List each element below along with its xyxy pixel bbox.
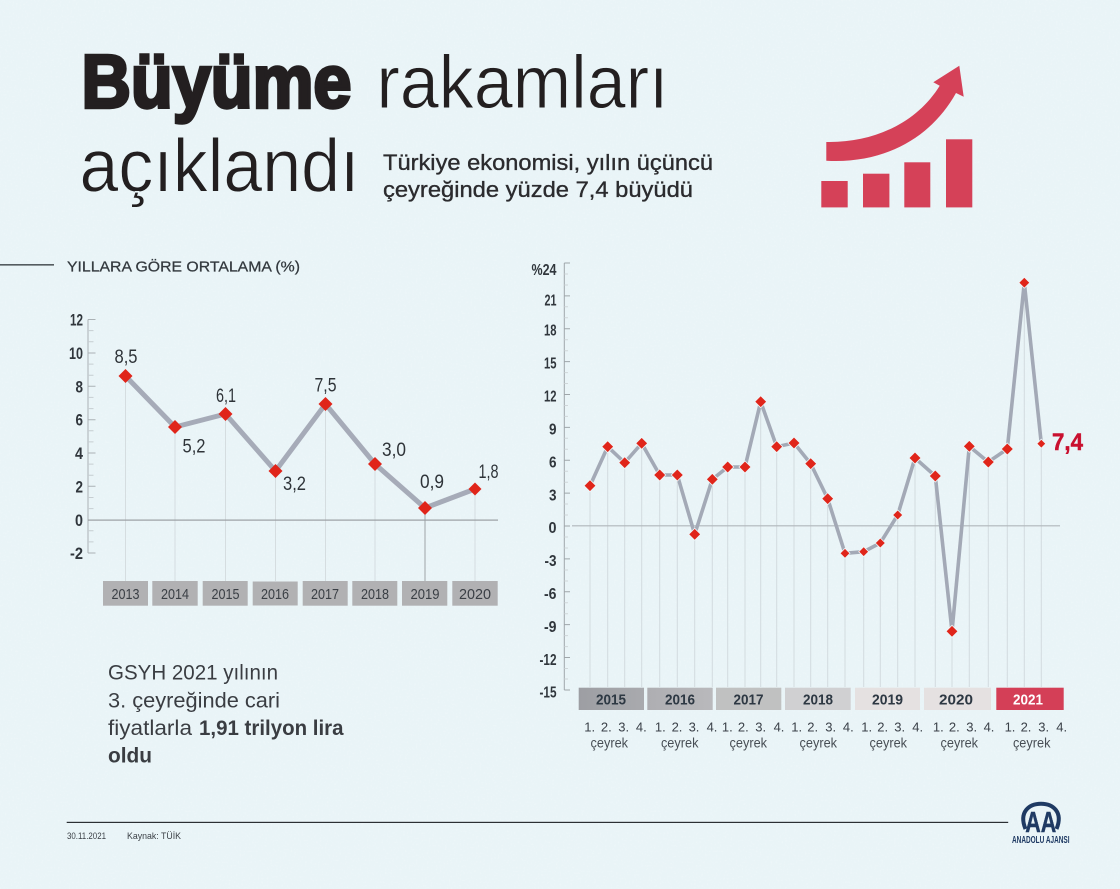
quarter labels: 1. [861,720,872,734]
footer source and date: 30.11.2021 [67,831,106,842]
right chart y axis labels: 9 [549,422,557,438]
logo: Anadolu Ajansı [1012,804,1070,846]
right chart y axis labels: -9 [544,619,557,636]
left chart year boxes: 2013 [112,586,140,603]
left chart y axis labels: 0 [75,511,83,530]
right chart year bars: 2018 [803,692,833,708]
quarter labels: 1. [584,720,595,734]
logo: Anadolu Ajansı: ANADOLU AJANSI [1012,835,1070,846]
quarter labels: 1. [1005,720,1015,734]
quarter labels: 3. [966,720,977,734]
left chart year boxes: 2019 [410,586,440,603]
quarter labels: çeyrek [800,736,837,750]
quarter labels: çeyrek [941,736,978,750]
right chart markers [584,277,1046,637]
quarter labels: 2. [738,720,749,734]
title: Büyüme [82,40,352,124]
left chart y axis labels: 8 [76,378,83,396]
quarter labels: 2. [807,720,818,734]
left chart year boxes: 2016 [261,586,289,603]
left chart value labels: 0,9 [420,472,444,493]
right chart year bars: 2016 [665,692,695,708]
left chart value labels: 3,2 [283,474,306,495]
right chart y axis labels: -12 [540,652,557,669]
icon: rising bars with arrow [821,66,972,207]
left chart year boxes [103,581,498,606]
right chart y axis labels: -6 [544,586,557,603]
left chart value labels: 6,1 [216,386,236,407]
subtitle [383,150,713,202]
subtitle: çeyreğinde yüzde 7,4 büyüdü [383,177,693,202]
footer source and date: Kaynak: TÜİK [127,831,182,842]
right chart y axis labels: -15 [540,684,557,702]
left chart year boxes: 2017 [311,586,339,603]
quarter labels: 2. [601,720,612,734]
left chart y axis labels [69,310,83,563]
right chart axis [564,263,570,690]
quarter labels: 1. [722,720,733,734]
right chart year bars [579,688,1064,710]
left chart markers [118,369,482,515]
quarter labels: 1. [933,720,944,734]
quarter labels: 3. [618,720,629,734]
right chart year bars: 2020 [939,692,973,708]
quarter labels [584,720,1067,750]
right chart y axis labels: -3 [544,553,557,570]
left chart year boxes: 2018 [361,586,389,603]
quarter labels: 3. [1038,720,1049,734]
title: rakamları [376,40,668,124]
right chart drop lines [590,283,1041,687]
left chart axis [88,320,96,553]
line chart: quarterly growth [532,262,1084,750]
left chart value labels: 1,8 [478,462,498,483]
right chart y axis labels: 0 [548,520,557,537]
left chart value labels: 5,2 [182,436,206,458]
GSYH text block: 3. çeyreğinde cari [108,689,280,712]
footer source and date [67,831,182,842]
title: açıklandı [80,124,360,208]
quarter labels: çeyrek [1013,736,1051,750]
right chart year bars: 2015 [596,692,626,708]
GSYH text block: 1,91 trilyon lira [199,717,344,740]
quarter labels: 2. [672,720,682,734]
left chart year boxes: 2014 [161,586,189,603]
right chart y axis labels [532,262,557,702]
right chart y axis labels: 21 [544,292,557,310]
left chart heading: YILLARA GÖRE ORTALAMA (%) [67,258,300,276]
quarter labels: 3. [825,720,836,734]
left chart y axis labels: 2 [76,478,83,496]
right chart y axis labels: 15 [544,356,557,372]
left chart y axis labels: 6 [76,410,83,430]
quarter labels: 3. [755,720,766,734]
quarter labels: çeyrek [661,736,699,750]
line chart: yearly average growth [69,310,498,606]
GSYH text block: oldu [108,745,152,768]
left chart value labels [114,347,498,495]
left chart y axis labels: 10 [69,344,83,363]
right chart y axis labels: 3 [549,488,557,504]
left chart year boxes: 2020 [459,586,491,603]
right chart year bars: 2021 [1013,692,1043,708]
quarter labels: 4. [774,720,784,734]
right chart y axis labels: 6 [549,454,557,472]
highlighted latest value: 7,4 [1052,429,1084,456]
footer rule [67,822,1008,823]
quarter labels: 4. [1056,720,1067,734]
quarter labels: 2. [877,720,888,734]
right chart year bars: 2017 [734,692,764,708]
quarter labels: çeyrek [591,736,628,750]
right chart y axis labels: %24 [532,262,557,279]
quarter labels: çeyrek [870,736,907,750]
left chart data line [126,376,475,508]
quarter labels: 1. [655,720,666,734]
GSYH text block: GSYH 2021 yılının [108,661,278,684]
right chart data line [590,283,1041,631]
left chart value labels: 7,5 [314,376,336,396]
quarter labels: 4. [707,720,717,734]
left chart value labels: 8,5 [114,347,138,368]
subtitle: Türkiye ekonomisi, yılın üçüncü [383,150,713,175]
right chart zero line [572,525,1060,526]
left chart year boxes: 2015 [212,586,240,603]
left chart y axis labels: 12 [70,310,83,330]
quarter labels: 1. [791,720,802,734]
right chart year bars: 2019 [872,692,903,708]
logo: Anadolu Ajansı: AA [1025,807,1056,839]
quarter labels: 2. [1021,720,1031,734]
quarter labels: 3. [689,720,699,734]
left chart zero line [88,520,498,521]
quarter labels: 2. [949,720,960,734]
left chart drop lines [126,376,475,581]
quarter labels: 4. [912,720,923,734]
quarter labels: 4. [984,720,994,734]
quarter labels: çeyrek [730,736,767,750]
right chart y axis labels: 12 [544,388,557,406]
quarter labels: 4. [636,720,647,734]
GSYH text block: fiyatlarla [108,717,192,740]
right chart y axis labels: 18 [544,322,557,340]
left chart y axis labels: 4 [75,444,83,463]
left chart value labels: 3,0 [382,440,406,461]
GSYH text block [108,661,344,768]
quarter labels: 4. [843,720,854,734]
title [80,40,668,208]
left chart y axis labels: -2 [70,544,83,563]
quarter labels: 3. [894,720,905,734]
